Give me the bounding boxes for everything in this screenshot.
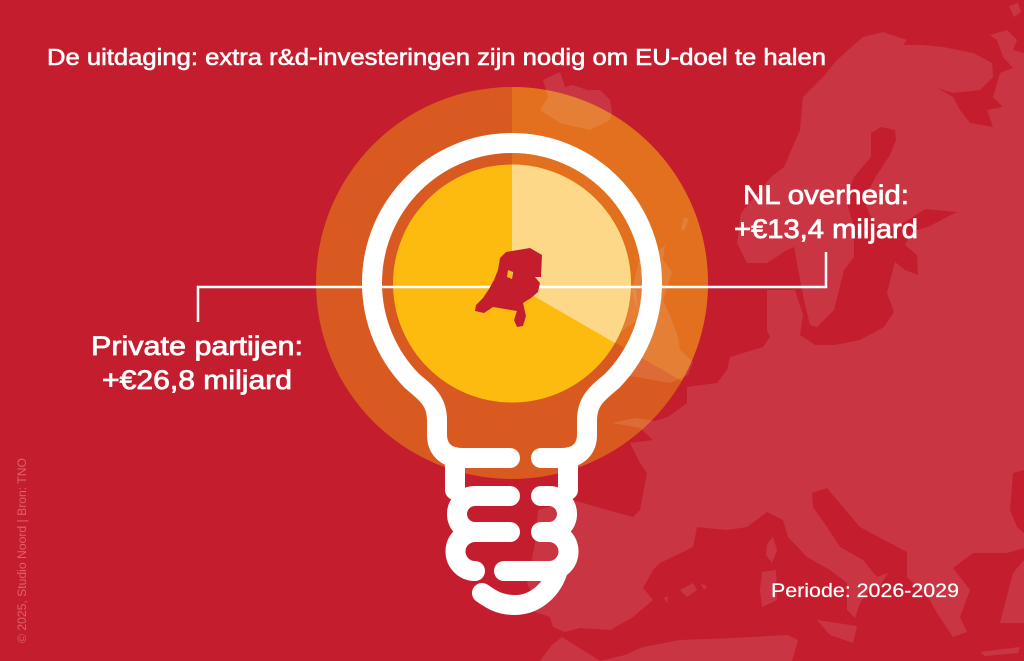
- label: NL overheid: +€13,4 miljard: [734, 214, 918, 244]
- Sardinia: [760, 570, 777, 607]
- light bulb outline: [372, 143, 652, 605]
- Sicily: [817, 620, 857, 643]
- map of Europe silhouette: [527, 3, 1024, 661]
- glass and neck: [372, 143, 652, 458]
- Great Britain: [625, 245, 693, 383]
- label: private partijen: Private partijen:: [91, 331, 303, 361]
- screw thread left: [455, 458, 510, 571]
- label: private partijen: [91, 331, 303, 395]
- pie: private partijen: [393, 164, 631, 402]
- Crete: [980, 647, 1020, 656]
- icon: Netherlands map: [475, 248, 542, 327]
- label: NL overheid: NL overheid:: [743, 180, 909, 210]
- mainland Europe: [527, 30, 1024, 637]
- Turkey coast: [1000, 560, 1024, 623]
- Ireland: [612, 285, 638, 332]
- screw tip: [482, 570, 558, 605]
- Corsica: [766, 537, 777, 563]
- Shetland: [681, 217, 689, 231]
- Balearic islands: [664, 583, 707, 603]
- orange halo circle with pie sectors: [316, 87, 708, 479]
- North Africa: [540, 635, 798, 661]
- Iceland: [540, 72, 612, 130]
- pie: NL overheid: [512, 164, 631, 343]
- label: private partijen: +€26,8 miljard: [102, 365, 292, 395]
- source credit: © 2025, Studio Noord | Bron: TNO: [17, 458, 29, 643]
- Arctic islet: [1009, 3, 1021, 17]
- title: De uitdaging: extra r&d-investeringen zijn nodig om EU-doel te halen: [47, 44, 826, 70]
- pie chart in the bulb: [393, 164, 631, 402]
- period note: Periode: 2026-2029: [771, 581, 959, 602]
- label: NL overheid: [734, 180, 918, 244]
- connector lines: [198, 252, 826, 322]
- screw thread right: [504, 458, 568, 571]
